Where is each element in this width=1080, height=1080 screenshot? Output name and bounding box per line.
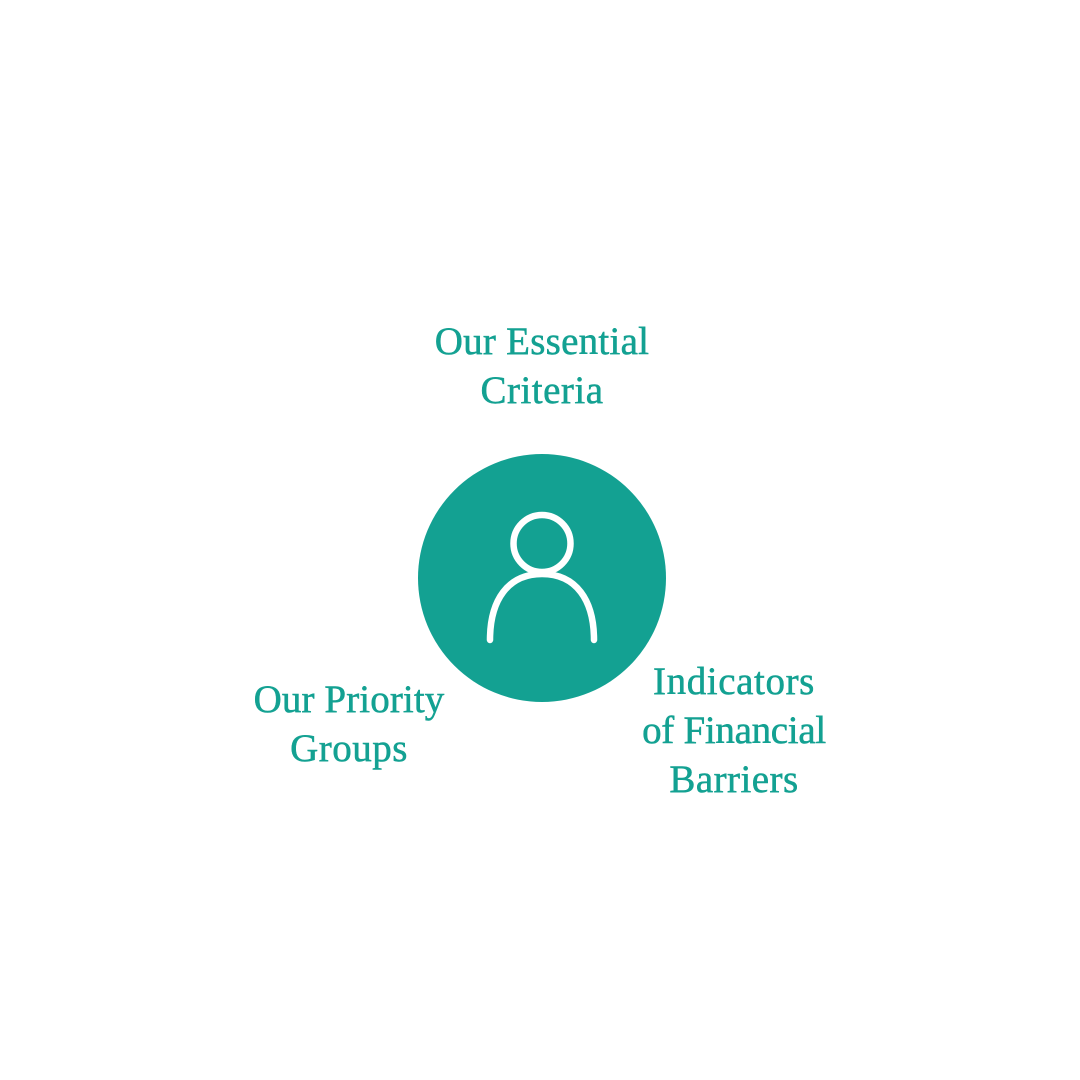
label: Our Priority Groups: Groups: [290, 727, 408, 770]
label: Our Priority Groups: [254, 678, 444, 770]
label: Indicators of Financial Barriers: Barriers: [669, 758, 799, 801]
heading: Our Essential Criteria: [435, 320, 649, 412]
icon: teal circle with person outline: [418, 454, 666, 702]
label: Our Priority Groups: Our Priority: [254, 678, 444, 721]
heading: Our Essential Criteria: Our Essential: [435, 320, 649, 363]
heading: Our Essential Criteria: Criteria: [480, 369, 604, 412]
label: Indicators of Financial Barriers: Indicators: [653, 660, 815, 703]
label: Indicators of Financial Barriers: of Financial: [642, 709, 826, 752]
label: Indicators of Financial Barriers: [642, 660, 826, 801]
